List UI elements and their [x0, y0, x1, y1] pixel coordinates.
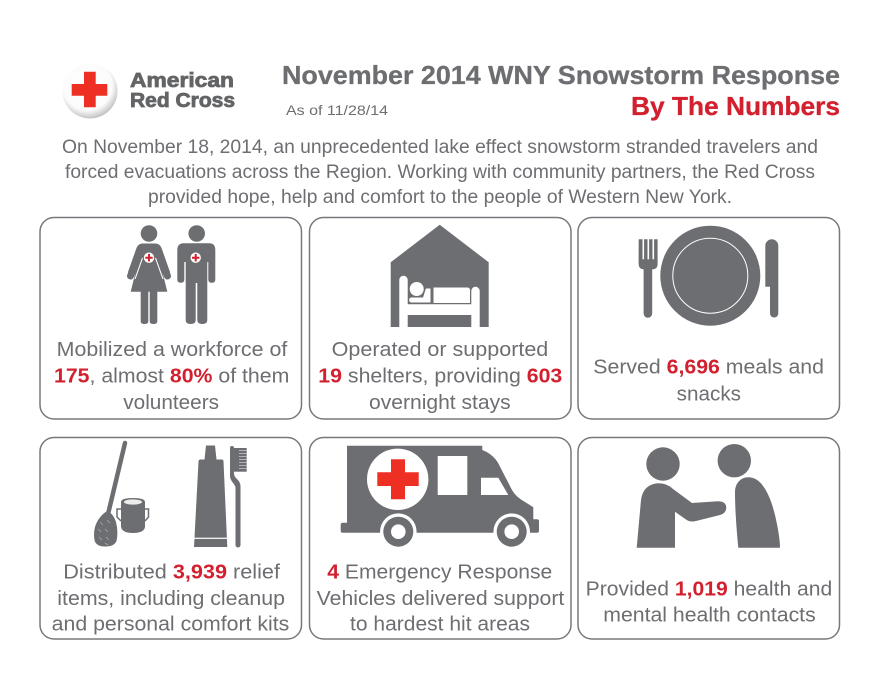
panel text: mental health contacts — [603, 604, 816, 627]
badge: man red cross — [190, 253, 201, 263]
panel text — [593, 356, 824, 406]
panel text: 175, almost 80% of them — [54, 365, 289, 388]
panel text: and personal comfort kits — [52, 613, 289, 636]
icon: man volunteer — [177, 225, 215, 324]
panel: health contacts — [578, 438, 840, 639]
panel text: Mobilized a workforce of — [57, 338, 288, 361]
logo: American Red Cross — [62, 64, 235, 118]
logo wordmark — [130, 70, 235, 112]
intro paragraph: provided hope, help and comfort to the people of Western New York. — [148, 187, 732, 208]
panel: relief items — [40, 438, 302, 639]
panel text: Served 6,696 meals and — [593, 356, 824, 378]
panel text: volunteers — [123, 391, 219, 414]
panel text — [586, 578, 832, 627]
icon: house with bed — [391, 225, 489, 327]
panel: emergency response vehicles — [310, 438, 571, 639]
logo wordmark: American — [130, 70, 234, 92]
badge: woman red cross — [144, 253, 154, 263]
panel text — [52, 560, 289, 636]
subtitle: By The Numbers: By The Numbers — [631, 91, 840, 121]
icon: red cross button — [62, 64, 118, 118]
panel text: Vehicles delivered support — [317, 587, 565, 610]
panel text: items, including cleanup — [57, 587, 285, 610]
intro paragraph — [62, 137, 818, 208]
title: November 2014 WNY Snowstorm Response — [282, 60, 840, 90]
panel text: 4 Emergency Response — [327, 560, 552, 583]
intro paragraph: forced evacuations across the Region. Working with community partners, the Red Cross — [65, 162, 815, 183]
panel text: 19 shelters, providing 603 — [318, 365, 562, 388]
intro paragraph: On November 18, 2014, an unprecedented lake effect snowstorm stranded travelers and — [62, 137, 818, 158]
panel text: to hardest hit areas — [350, 613, 530, 636]
icon: plate, fork and knife — [639, 226, 778, 326]
logo wordmark: Red Cross — [130, 90, 235, 112]
panel text — [318, 338, 562, 414]
panel: shelters — [310, 218, 571, 419]
panel: workforce — [40, 218, 302, 419]
icon: emergency response vehicle — [341, 446, 539, 550]
panel text — [317, 560, 565, 636]
panel: meals — [578, 218, 840, 419]
icon: mop and bucket — [94, 443, 148, 547]
icon: woman volunteer — [128, 225, 170, 324]
panel text — [54, 338, 289, 414]
panel text: Distributed 3,939 relief — [63, 560, 280, 583]
panel text: overnight stays — [369, 391, 511, 414]
panel text: snacks — [677, 382, 741, 406]
icon: toothpaste and toothbrush — [194, 446, 247, 548]
panel text: Provided 1,019 health and — [586, 578, 832, 601]
as-of date: As of 11/28/14 — [286, 102, 388, 118]
icon: two people, one comforting the other — [637, 444, 780, 548]
panel text: Operated or supported — [332, 338, 548, 361]
